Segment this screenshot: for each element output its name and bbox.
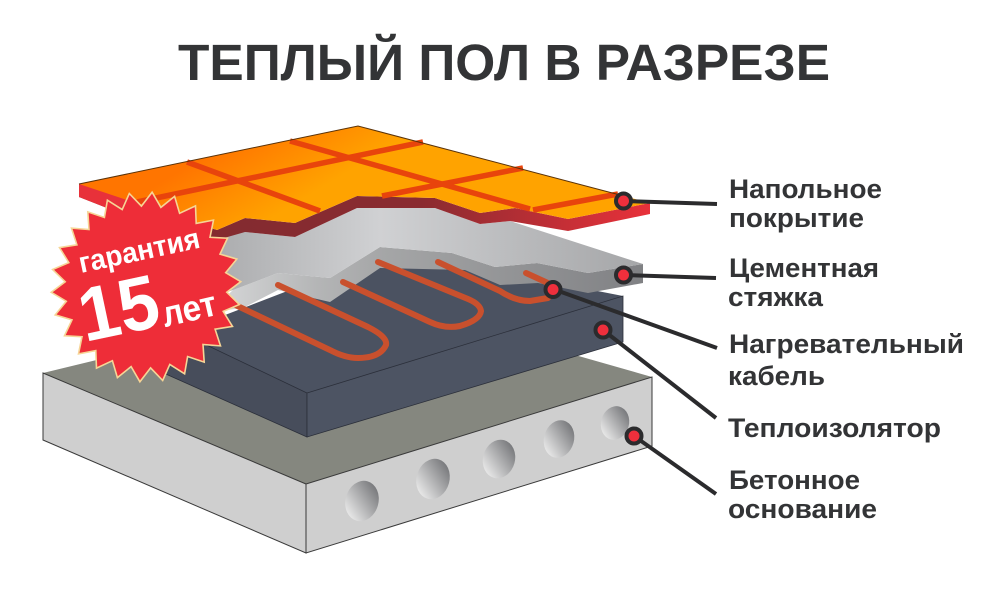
tile top outline [79, 126, 620, 195]
insulator right face [307, 296, 623, 437]
floor covering tile [79, 126, 650, 240]
label: floor covering [729, 174, 882, 233]
screed side face [210, 247, 643, 312]
label: floor covering: Напольное [729, 174, 882, 204]
insulator top face [160, 258, 623, 393]
leader lines [553, 201, 717, 494]
label: floor covering: покрытие [729, 203, 864, 233]
concrete base slab [43, 335, 652, 553]
label: heating cable: Нагревательный [729, 329, 964, 359]
cement screed [205, 208, 643, 312]
label: heating cable: кабель [728, 361, 825, 391]
warranty number: 15 [71, 259, 167, 359]
heat insulator [150, 258, 623, 437]
marker dots [546, 194, 642, 444]
label: cement screed: Цементная [729, 253, 879, 283]
warranty badge [51, 192, 241, 382]
heating cable [225, 262, 550, 358]
tile edge band [79, 184, 650, 240]
label: concrete base: Бетонное [729, 465, 860, 495]
starburst [51, 192, 241, 382]
label: concrete base: основание [728, 494, 877, 524]
label: concrete base [728, 465, 877, 524]
concrete top surface [43, 335, 652, 484]
warranty word: гарантия [76, 223, 203, 280]
label: heat insulator: Теплоизолятор [728, 413, 941, 443]
tile grout lines [137, 141, 618, 211]
title: ТЕПЛЫЙ ПОЛ В РАЗРЕЗЕ [178, 33, 830, 91]
warranty years: лет [158, 282, 220, 335]
label: heating cable [728, 329, 964, 391]
screed top surface [205, 208, 643, 300]
insulator left face [150, 318, 307, 437]
concrete holes [341, 403, 633, 525]
tile top surface [79, 126, 650, 230]
label: cement screed: стяжка [728, 282, 823, 312]
label: cement screed [728, 253, 879, 312]
concrete left face [43, 373, 306, 553]
concrete right face [306, 377, 652, 553]
